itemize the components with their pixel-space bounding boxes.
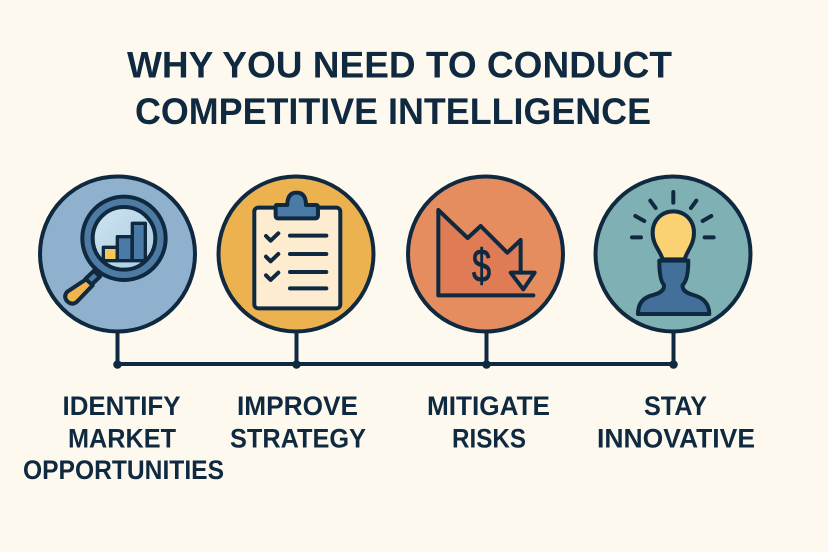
label: mitigate risks: RISKS (452, 424, 526, 454)
label: improve strategy (230, 391, 366, 454)
label: mitigate risks: MITIGATE (427, 391, 550, 421)
label: improve strategy: IMPROVE (237, 391, 358, 421)
panel: mitigate risks icon (408, 176, 563, 332)
label: stay innovative: STAY (644, 391, 707, 421)
label: identify market opportunities: IDENTIFY (62, 391, 180, 421)
label: stay innovative: INNOVATIVE (597, 424, 755, 454)
icon: clipboard checklist (254, 193, 340, 308)
label: identify market opportunities: MARKET (68, 424, 176, 454)
icon: person with light bulb (632, 192, 714, 314)
label: improve strategy: STRATEGY (230, 424, 366, 454)
panel: stay innovative icon (596, 176, 750, 332)
label: stay innovative (597, 391, 755, 454)
icon: falling chart with dollar sign (438, 210, 535, 295)
icon: magnifying glass with bar chart (65, 197, 166, 304)
panel: improve strategy icon (218, 176, 374, 332)
panel: identify market opportunities icon (40, 176, 195, 332)
timeline connector (115, 330, 676, 367)
title: WHY YOU NEED TO CONDUCT (127, 44, 672, 86)
title (127, 44, 672, 132)
title: COMPETITIVE INTELLIGENCE (135, 91, 651, 132)
label: identify market opportunities (23, 391, 224, 485)
label: identify market opportunities: OPPORTUNITIES (23, 455, 224, 485)
dollar sign: $ (472, 239, 491, 291)
label: mitigate risks (427, 391, 550, 454)
